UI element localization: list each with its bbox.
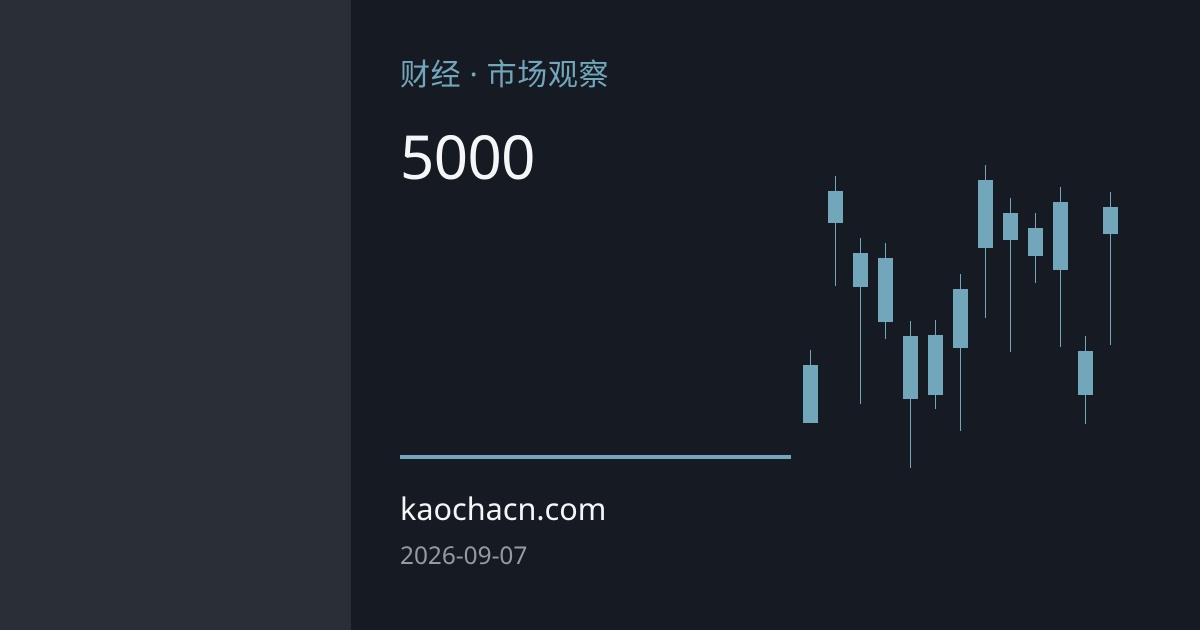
candle 2: [828, 176, 843, 286]
candle 4: [878, 243, 893, 339]
candle 1: [803, 350, 818, 423]
candlestick chart: [803, 165, 1118, 468]
accent divider: [400, 455, 791, 459]
main title number: 5000: [400, 115, 535, 197]
candle 7: [953, 274, 968, 431]
candle 3: [853, 238, 868, 404]
candle 10: [1028, 213, 1043, 283]
left panel: [0, 0, 351, 630]
candle 5: [903, 321, 918, 468]
site domain: kaochacn.com: [400, 487, 606, 529]
candle 12: [1078, 336, 1093, 424]
candle 13: [1103, 192, 1118, 345]
candle 11: [1053, 187, 1068, 347]
category heading: 财经 · 市场观察: [400, 53, 609, 94]
candle 9: [1003, 198, 1018, 352]
date: 2026-09-07: [400, 539, 527, 572]
candle 8: [978, 165, 993, 318]
candle 6: [928, 320, 943, 409]
